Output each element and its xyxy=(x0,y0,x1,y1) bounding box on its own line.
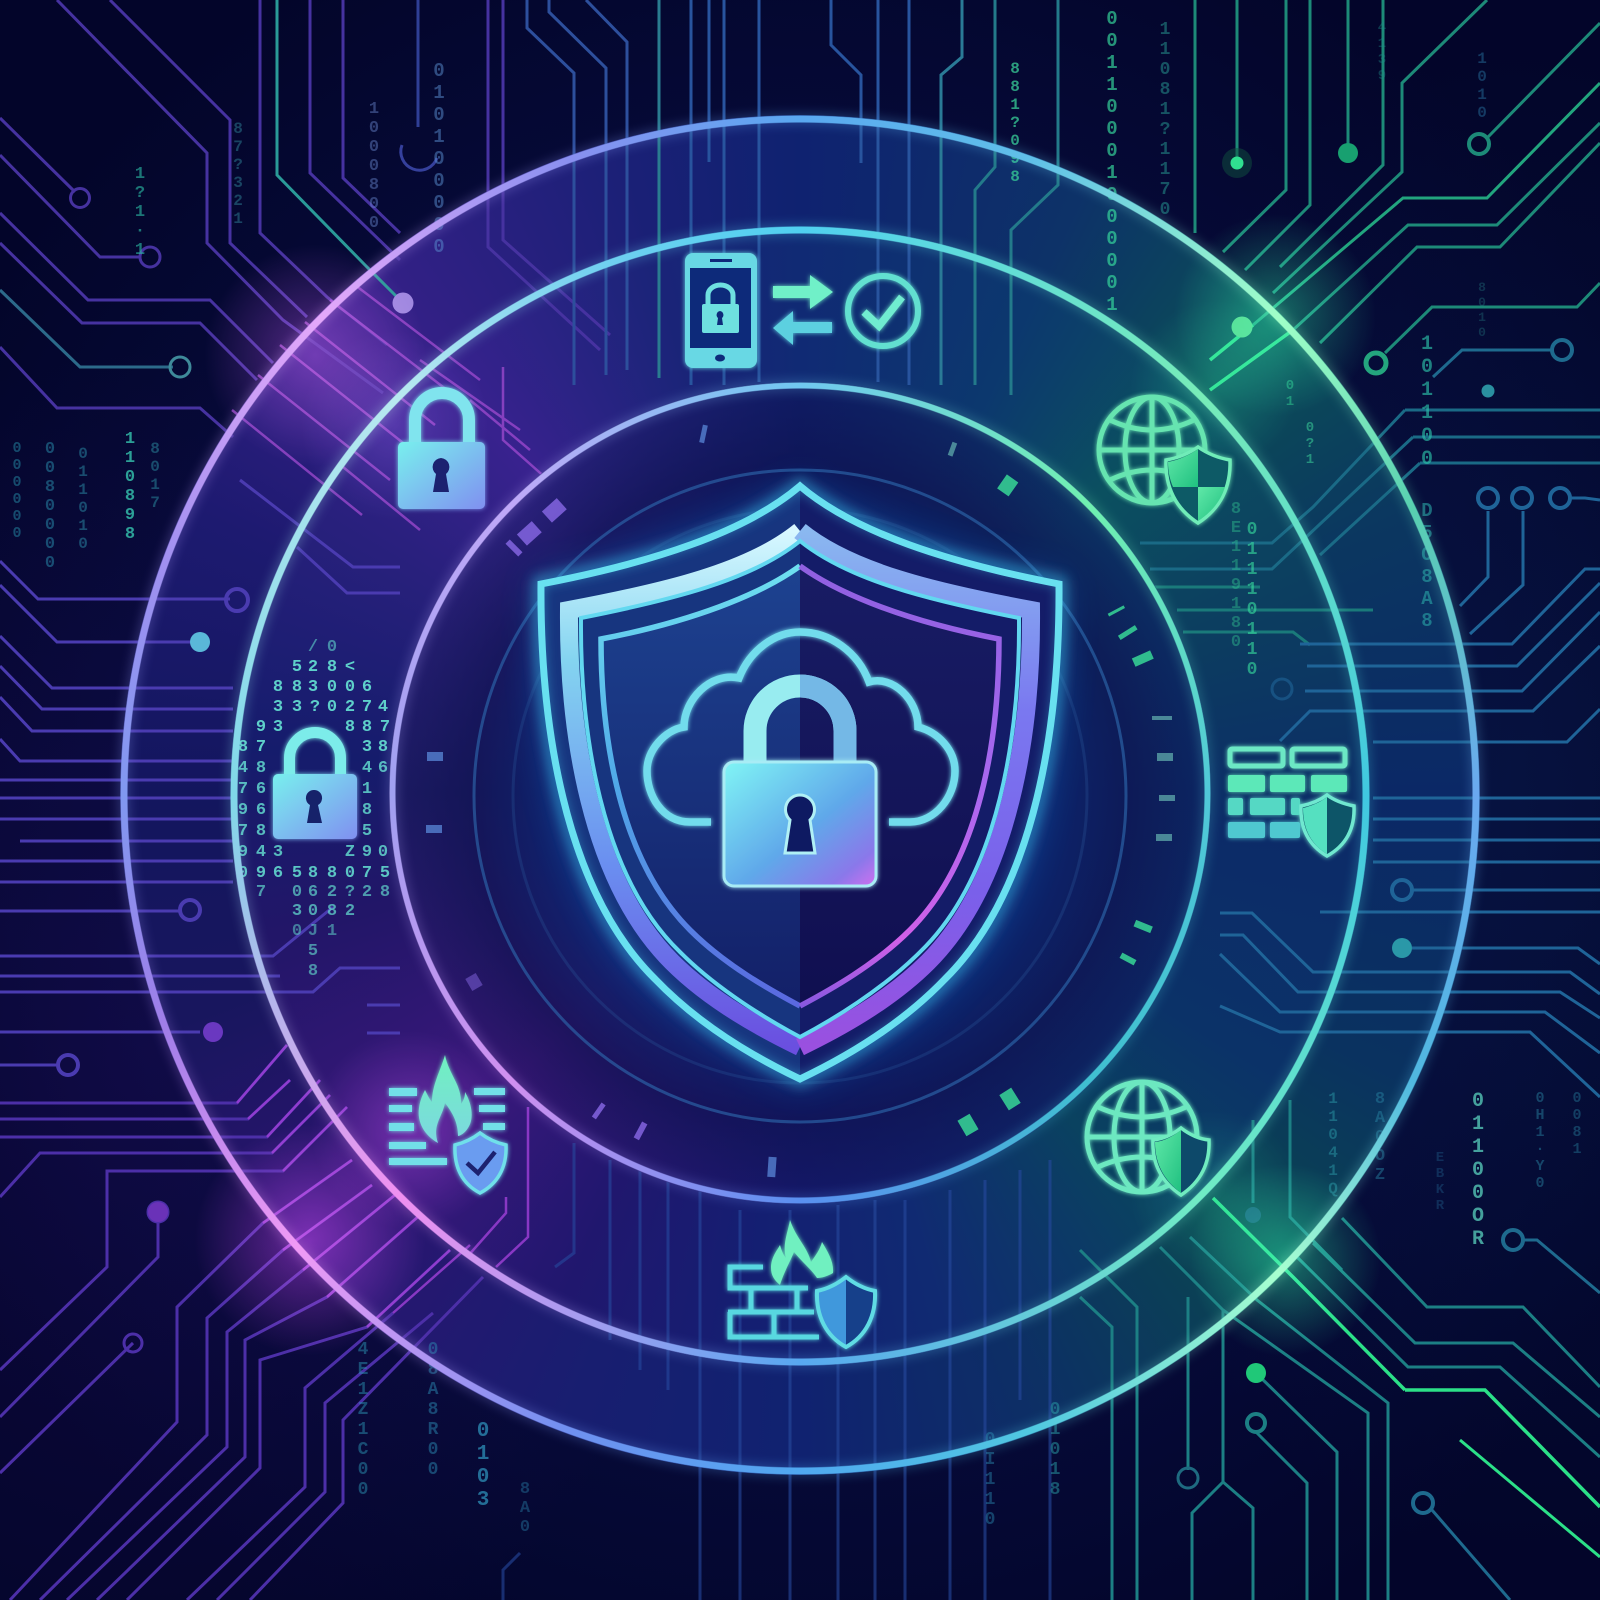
icon: brick wall with flame and shield xyxy=(728,1220,875,1347)
ring: middle xyxy=(230,226,1370,1366)
binary data streams: 0080000 xyxy=(40,440,60,573)
shield outline glow xyxy=(538,483,1062,1082)
encrypted digits matrix around left lock: 8738 xyxy=(238,738,388,757)
icon: globe with half shield xyxy=(1087,1082,1209,1195)
shield outer line xyxy=(541,486,1059,1079)
panel: outer ring band xyxy=(120,115,1480,1475)
encrypted digits matrix around left lock: 5 xyxy=(308,942,318,961)
encrypted digits matrix around left lock xyxy=(238,638,390,981)
icon: globe with quartered shield xyxy=(1099,397,1230,523)
circuit traces: top left xyxy=(0,0,610,437)
binary data streams: 1010 xyxy=(1473,50,1491,122)
padlock shackle xyxy=(755,686,845,762)
binary data streams: 11041Q xyxy=(1324,1090,1342,1198)
binary data streams: 000000 xyxy=(8,440,26,542)
outer ring glow xyxy=(114,108,1486,1482)
binary data streams: 0081 xyxy=(1568,1090,1586,1158)
binary data streams: 11081?1170 xyxy=(1155,20,1175,220)
icon: phone with exchange and check xyxy=(685,253,918,368)
ring ticks xyxy=(426,425,1175,1177)
shield inner line right xyxy=(800,566,999,1006)
binary data streams: 8010 xyxy=(1474,280,1490,340)
encrypted digits matrix around left lock: 761 xyxy=(238,780,372,799)
encrypted digits matrix around left lock: 93887 xyxy=(256,718,390,737)
encrypted digits matrix around left lock: 4846 xyxy=(238,759,388,778)
binary data streams: 0103 xyxy=(472,1420,494,1512)
encrypted digits matrix around left lock: 0J1 xyxy=(292,922,337,941)
icon: brick wall with shield xyxy=(1228,749,1354,856)
shield inner plate xyxy=(601,566,800,1006)
binary data streams: 110898 xyxy=(120,430,140,544)
binary data streams: 01100OR xyxy=(1466,1090,1490,1251)
binary data streams: 01018 xyxy=(1045,1400,1065,1500)
icon: padlock top left xyxy=(398,393,485,509)
encrypted digits matrix around left lock: 528< xyxy=(292,658,355,677)
binary data streams: 8017 xyxy=(146,440,164,512)
bright green traces xyxy=(1210,325,1600,1557)
shield back glow xyxy=(538,483,1062,1082)
shield thin cyan line xyxy=(581,541,1019,1037)
cloud outline xyxy=(647,632,955,822)
encrypted digits matrix around left lock: 968 xyxy=(238,801,372,820)
faint concentric rings behind shield xyxy=(474,470,1126,1122)
encrypted digits matrix around left lock: 096588075 xyxy=(238,864,390,883)
binary data streams: 00110001000001 xyxy=(1101,8,1123,316)
shield middle band xyxy=(569,531,800,1047)
binary data streams: EBKR xyxy=(1432,1150,1448,1214)
binary data streams: 881?098 xyxy=(1006,60,1024,186)
binary data streams: 1000800 xyxy=(364,100,384,233)
circuit traces: bottom centre xyxy=(503,1143,1050,1600)
icon: padlock with encrypted data xyxy=(273,732,357,839)
binary data streams: 8A0 xyxy=(516,1480,534,1537)
binary data streams: 101100 xyxy=(1416,333,1438,471)
binary data streams: 0H1·Y0 xyxy=(1532,1090,1548,1192)
binary data streams: D5O8A8 xyxy=(1416,500,1438,632)
shield inner line left xyxy=(601,566,800,1006)
binary data streams: 8E119180 xyxy=(1226,500,1246,652)
binary data streams: 8A0OZ xyxy=(1370,1090,1390,1185)
panel: inner disc xyxy=(389,382,1211,1204)
padlock body xyxy=(724,762,876,886)
main shield xyxy=(538,483,1062,1082)
encrypted digits matrix around left lock: 785 xyxy=(238,822,372,841)
encrypted digits matrix around left lock: /0 xyxy=(308,638,337,657)
circuit traces: glowing lines in upper-left band xyxy=(232,285,565,530)
encrypted digits matrix around left lock: 7062?28 xyxy=(256,883,390,902)
binary data streams: 1?1·1 xyxy=(130,165,150,260)
binary data streams: 08A8R00 xyxy=(423,1340,443,1480)
binary data streams: 87?321 xyxy=(229,120,247,228)
binary data streams: 4139 xyxy=(1374,20,1390,84)
padlock keyhole xyxy=(785,795,815,853)
binary data streams: 0I110 xyxy=(980,1430,1000,1530)
ring: inner xyxy=(389,382,1211,1204)
binary data streams: 010100000 xyxy=(428,60,450,258)
encrypted digits matrix around left lock: 943Z90 xyxy=(238,843,388,862)
ring: outer xyxy=(120,115,1480,1475)
circuit traces: top centre xyxy=(527,0,1058,395)
binary data streams: 01110110 xyxy=(1242,520,1262,680)
encrypted digits matrix around left lock: 883006 xyxy=(273,678,372,697)
encrypted digits matrix around left lock: 8 xyxy=(308,962,318,981)
encrypted digits matrix around left lock: 33?0274 xyxy=(273,698,388,717)
icon: firewall list with flame and shield xyxy=(389,1055,506,1193)
panel: middle ring band xyxy=(230,226,1370,1366)
circuit dots xyxy=(148,143,1494,1383)
binary data streams: 011010 xyxy=(74,445,92,553)
circuit traces: bottom left xyxy=(0,1045,483,1600)
circuit traces: top right xyxy=(1140,0,1600,645)
binary data streams: 0?1 xyxy=(1302,420,1318,468)
binary data streams: 4E1Z1C00 xyxy=(353,1340,373,1500)
circuit traces: left horizontals xyxy=(0,480,400,1075)
circuit trace: teal connector to dot xyxy=(277,0,403,303)
circuit traces: bottom right xyxy=(1080,1100,1600,1600)
encrypted digits matrix around left lock: 3082 xyxy=(292,902,355,921)
binary data streams: 01 xyxy=(1282,378,1298,410)
circuit traces: glowing lines in lower-left band xyxy=(237,1045,528,1327)
shield outer plate xyxy=(538,483,800,1082)
circuit traces: right horizontals xyxy=(1220,488,1600,1097)
